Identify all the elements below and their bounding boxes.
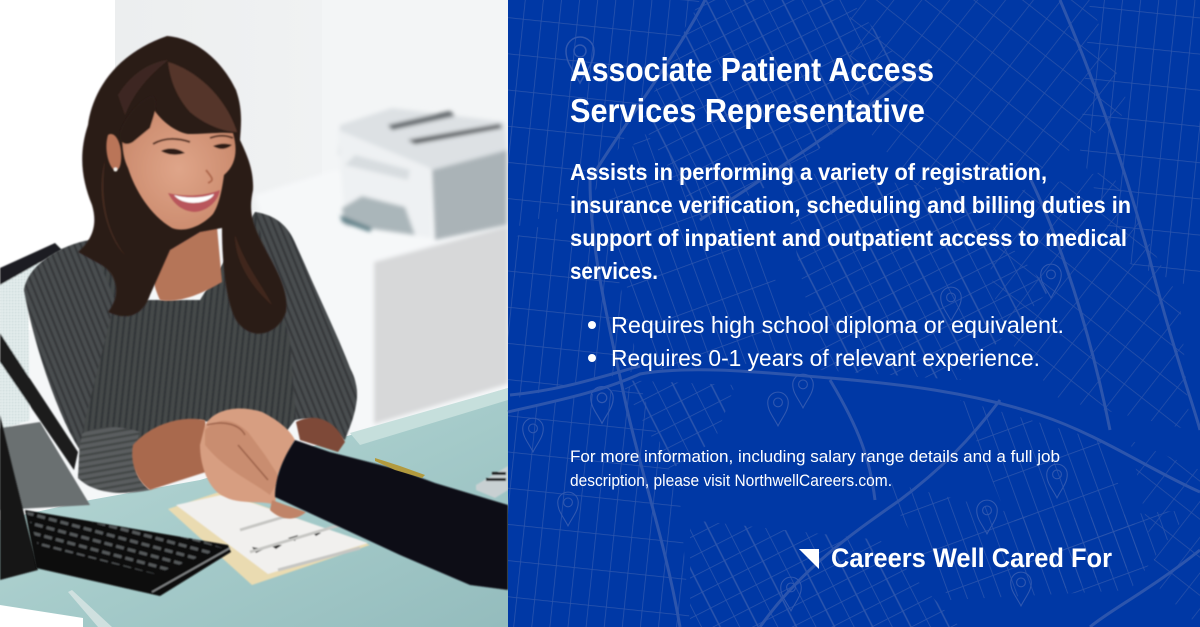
street map pattern — [508, 0, 1200, 627]
photo background wall — [0, 0, 508, 520]
woman neck and chest — [154, 228, 223, 302]
woman smile — [168, 190, 220, 212]
woman sweater — [24, 212, 357, 493]
printer — [338, 108, 507, 240]
map location pins — [523, 37, 1067, 611]
more information note — [570, 448, 1060, 490]
woman hair — [78, 36, 286, 334]
keyboard — [25, 510, 231, 596]
calculator — [476, 466, 508, 498]
computer monitor — [0, 415, 38, 580]
title — [570, 51, 934, 129]
title: Associate Patient Access — [570, 51, 934, 88]
job description paragraph: services. — [570, 258, 658, 284]
woman forearms — [132, 418, 345, 490]
woman face — [106, 96, 236, 230]
office cabinet — [263, 197, 508, 424]
office chair — [0, 243, 90, 510]
major roads — [508, 0, 1200, 627]
desk surface — [0, 388, 508, 627]
handshake — [200, 408, 306, 519]
black sleeve of visitor — [275, 440, 508, 590]
requirements list: Requires high school diploma or equivalent. — [611, 312, 1064, 338]
folder with paper — [168, 491, 370, 585]
requirements list: Requires 0-1 years of relevant experience. — [611, 345, 1040, 371]
more information note: For more information, including salary range details and a full job — [570, 448, 1060, 466]
job description paragraph — [570, 159, 1131, 284]
more information note: description, please visit NorthwellCareers.com. — [570, 472, 892, 490]
job description paragraph: Assists in performing a variety of registration, — [570, 159, 1047, 185]
panel: office photo — [0, 0, 508, 627]
panel: blue background with street map — [508, 0, 1200, 627]
tagline with logo mark: Careers Well Cared For — [831, 543, 1112, 573]
title: Services Representative — [570, 92, 925, 129]
job description paragraph: support of inpatient and outpatient access to medical — [570, 225, 1127, 251]
icon: corner triangle — [799, 549, 819, 569]
requirements list — [588, 312, 1064, 371]
job description paragraph: insurance verification, scheduling and billing duties in — [570, 192, 1131, 218]
pen on desk — [375, 458, 425, 478]
